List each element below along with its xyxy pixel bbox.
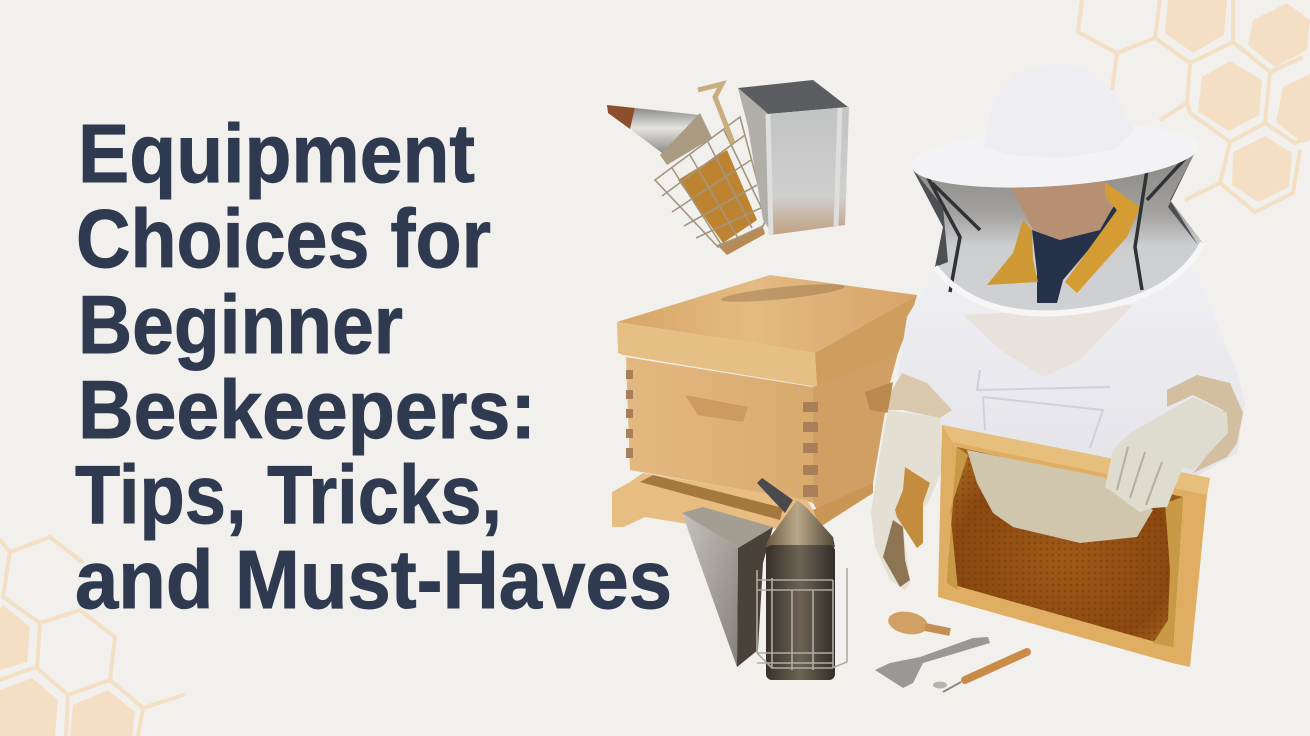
yellow collar <box>987 220 1038 285</box>
illustration: hive tool <box>875 637 990 688</box>
veil cape <box>963 305 1133 377</box>
veil straps <box>928 150 1193 292</box>
honeycomb decoration: bottom left <box>0 537 183 736</box>
title: and Must-Haves <box>75 533 672 626</box>
left glove <box>871 410 942 590</box>
title: Tips, Tricks, <box>75 448 502 541</box>
title: Equipment <box>78 107 475 200</box>
honeycomb decoration: top right <box>1078 0 1310 212</box>
title: Beekeepers: <box>78 363 536 456</box>
title: Choices for <box>76 192 491 285</box>
illustration: bottom smoker <box>682 478 847 680</box>
shirt <box>1032 205 1118 303</box>
illustration: wooden hive <box>612 275 917 530</box>
illustration: top smoker and tin <box>607 80 849 255</box>
hat brim <box>909 116 1201 196</box>
title: Beginner <box>78 278 403 371</box>
canister <box>766 545 835 680</box>
spout <box>757 478 793 513</box>
hat crown <box>983 63 1135 158</box>
face <box>1010 180 1113 240</box>
right sleeve cuff <box>1167 375 1243 473</box>
suit body <box>898 267 1245 480</box>
illustration: beekeeper <box>871 63 1245 590</box>
title <box>75 107 672 626</box>
bellows <box>682 513 738 667</box>
left sleeve cuff <box>888 373 952 418</box>
illustration: brush tool <box>933 652 1027 692</box>
illustration: honey dipper <box>886 609 950 637</box>
illustration: honey frame <box>938 397 1228 667</box>
right glove <box>1105 397 1228 512</box>
veil ring <box>935 243 1203 313</box>
pocket <box>977 370 1110 448</box>
wire cage <box>757 568 847 670</box>
hood mesh <box>912 146 1203 313</box>
dome <box>766 500 835 547</box>
